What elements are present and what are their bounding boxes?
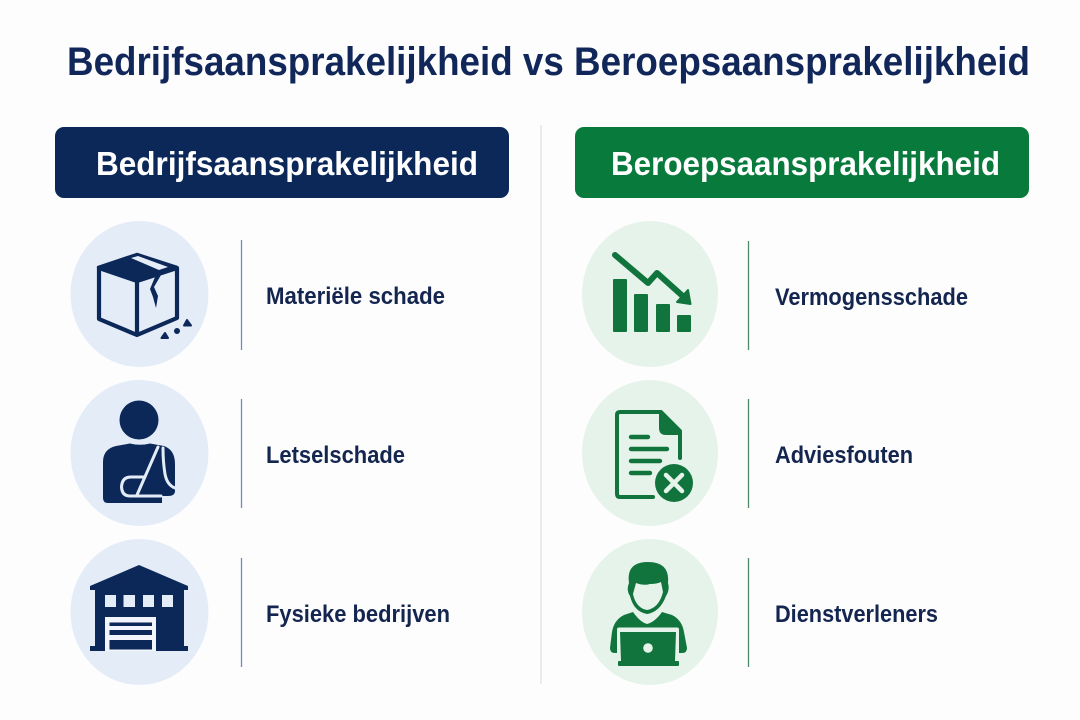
- icon: person at laptop: [582, 539, 718, 685]
- heading: Bedrijfsaansprakelijkheid: Bedrijfsaansprakelijkheid: [96, 145, 478, 182]
- label: Dienstverleners: Dienstverleners: [775, 601, 938, 628]
- icon: person with arm sling: [70, 380, 208, 526]
- row: Letselschade: [70, 380, 405, 526]
- icon: warehouse: [70, 539, 208, 685]
- heading: Beroepsaansprakelijkheid: Beroepsaansprakelijkheid: [611, 145, 1000, 182]
- label: Letselschade: Letselschade: [266, 442, 405, 469]
- panel: Beroepsaansprakelijkheid: [575, 127, 1029, 685]
- heading: Beroepsaansprakelijkheid: [575, 127, 1029, 198]
- icon: damaged box: [70, 221, 208, 367]
- row: Adviesfouten: [582, 380, 913, 526]
- row: Vermogensschade: [582, 221, 968, 367]
- row: Fysieke bedrijven: [70, 539, 450, 685]
- label: Adviesfouten: Adviesfouten: [775, 442, 913, 469]
- icon: document with error: [582, 380, 718, 526]
- icon: declining bar chart: [582, 221, 718, 367]
- label: Vermogensschade: Vermogensschade: [775, 284, 968, 311]
- label: Materiële schade: Materiële schade: [266, 283, 445, 310]
- panel: Bedrijfsaansprakelijkheid: [55, 127, 509, 685]
- row: Dienstverleners: [582, 539, 938, 685]
- heading: Bedrijfsaansprakelijkheid: [55, 127, 509, 198]
- label: Fysieke bedrijven: Fysieke bedrijven: [266, 601, 450, 628]
- row: Materiële schade: [70, 221, 445, 367]
